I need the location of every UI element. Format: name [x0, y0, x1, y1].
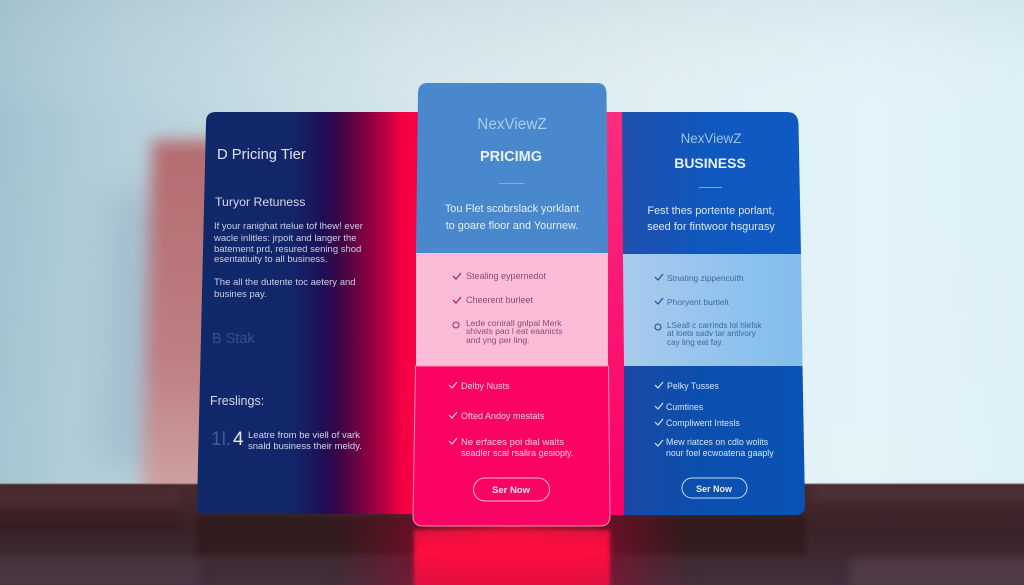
- stat number: [211, 429, 244, 450]
- body paragraph: batement prd, resured sening shod: [214, 244, 361, 255]
- feature list: [453, 271, 562, 345]
- button: ser now: Ser Now: [696, 484, 733, 494]
- description: Fest thes portente porlant,: [647, 205, 775, 217]
- body paragraph: If your ranighat rtelue tof lhew! ever: [214, 221, 363, 232]
- feature list: at loets sadv tar antlvory: [667, 329, 757, 338]
- title: business: BUSINESS: [674, 155, 746, 171]
- business header section: [622, 112, 801, 254]
- feature list: LSeall c carrinds lol hlefsk: [667, 321, 763, 330]
- feature list: Delby Nusts: [461, 381, 510, 391]
- stat number: 4: [233, 429, 244, 450]
- feature list: Compliwent Intesls: [666, 418, 740, 428]
- feature list: Phoryent burtielt: [667, 297, 730, 307]
- table surface: [0, 484, 1024, 585]
- feature list: Mew riatces on cdlo wolits: [666, 437, 769, 447]
- panel: left dark pricing tier: [197, 112, 420, 514]
- feature list: cay ling eat fay.: [667, 338, 723, 347]
- brand name: NexViewZ: [681, 131, 741, 146]
- description: [445, 203, 579, 232]
- body paragraph: esentatiuity to all business.: [214, 254, 328, 265]
- feature list: Lede conirall gnlpal Merk: [466, 318, 562, 328]
- wall shadow behind left panel: [100, 140, 225, 500]
- description: [647, 205, 775, 233]
- feature list: [655, 273, 763, 347]
- description: Tou Flet scobrslack yorklant: [445, 203, 579, 215]
- light features section: [623, 254, 802, 366]
- feature list: Stealing eypernedot: [466, 271, 547, 281]
- feature list: Pelky Tusses: [667, 381, 719, 391]
- stat description: [248, 430, 362, 452]
- body paragraph two: The all the dutente toc aetery and: [214, 277, 356, 288]
- hot pink features section: [413, 366, 610, 526]
- pink strip between centre and right panels: [600, 112, 626, 515]
- description: to goare floor and Yournew.: [446, 220, 578, 232]
- feature list: nour foel ecwoatena gaaply: [666, 448, 774, 458]
- feelings heading: Freslings:: [210, 394, 264, 408]
- body paragraph: wacle inlitles: jrpoit and langer the: [213, 233, 357, 244]
- body paragraph two: [214, 277, 356, 300]
- panel: right business tier: [622, 112, 805, 515]
- feature list: Stnating zippencuith: [667, 273, 744, 283]
- stat description: Leatre from be viell of vark: [248, 430, 360, 441]
- feature list: [655, 381, 774, 458]
- panel: centre pricing tier: [413, 83, 610, 526]
- feature list: Ofted Andoy mestats: [461, 411, 545, 421]
- subheading: Turyor Retuness: [215, 195, 305, 209]
- feature list: seadler scal rsalira gesioply.: [461, 448, 573, 458]
- brand name: NexViewZ: [477, 116, 547, 133]
- reflection of centre panel: [414, 530, 610, 585]
- description: seed for fintwoor hsgurasy: [647, 221, 775, 233]
- button: ser now: [474, 478, 550, 501]
- title: pricing: PRICIMG: [480, 149, 542, 165]
- feature list: Cheerent burleet: [466, 295, 534, 305]
- feature list: Cumtines: [666, 402, 704, 412]
- pink features section: [416, 253, 608, 366]
- dark features section: [624, 366, 805, 515]
- feature list: Ne erfaces poi dial walts: [461, 437, 564, 448]
- centre header section: [416, 83, 608, 253]
- heading: D Pricing Tier: D Pricing Tier: [217, 147, 306, 163]
- feature list: [449, 381, 573, 458]
- body paragraph two: busines pay.: [214, 289, 267, 300]
- button: ser now: [682, 478, 747, 498]
- button: ser now: Ser Now: [492, 485, 531, 496]
- stat description: snald business their meldy.: [248, 441, 362, 452]
- feature list: and yng per ling.: [466, 335, 530, 345]
- stat number: 1l.: [211, 429, 231, 450]
- reflection of panels: [197, 516, 805, 554]
- body paragraph: [213, 221, 363, 265]
- feature list: shivats pao l eat eaanicts: [466, 326, 562, 336]
- faded stak label: B Stak: [212, 331, 255, 347]
